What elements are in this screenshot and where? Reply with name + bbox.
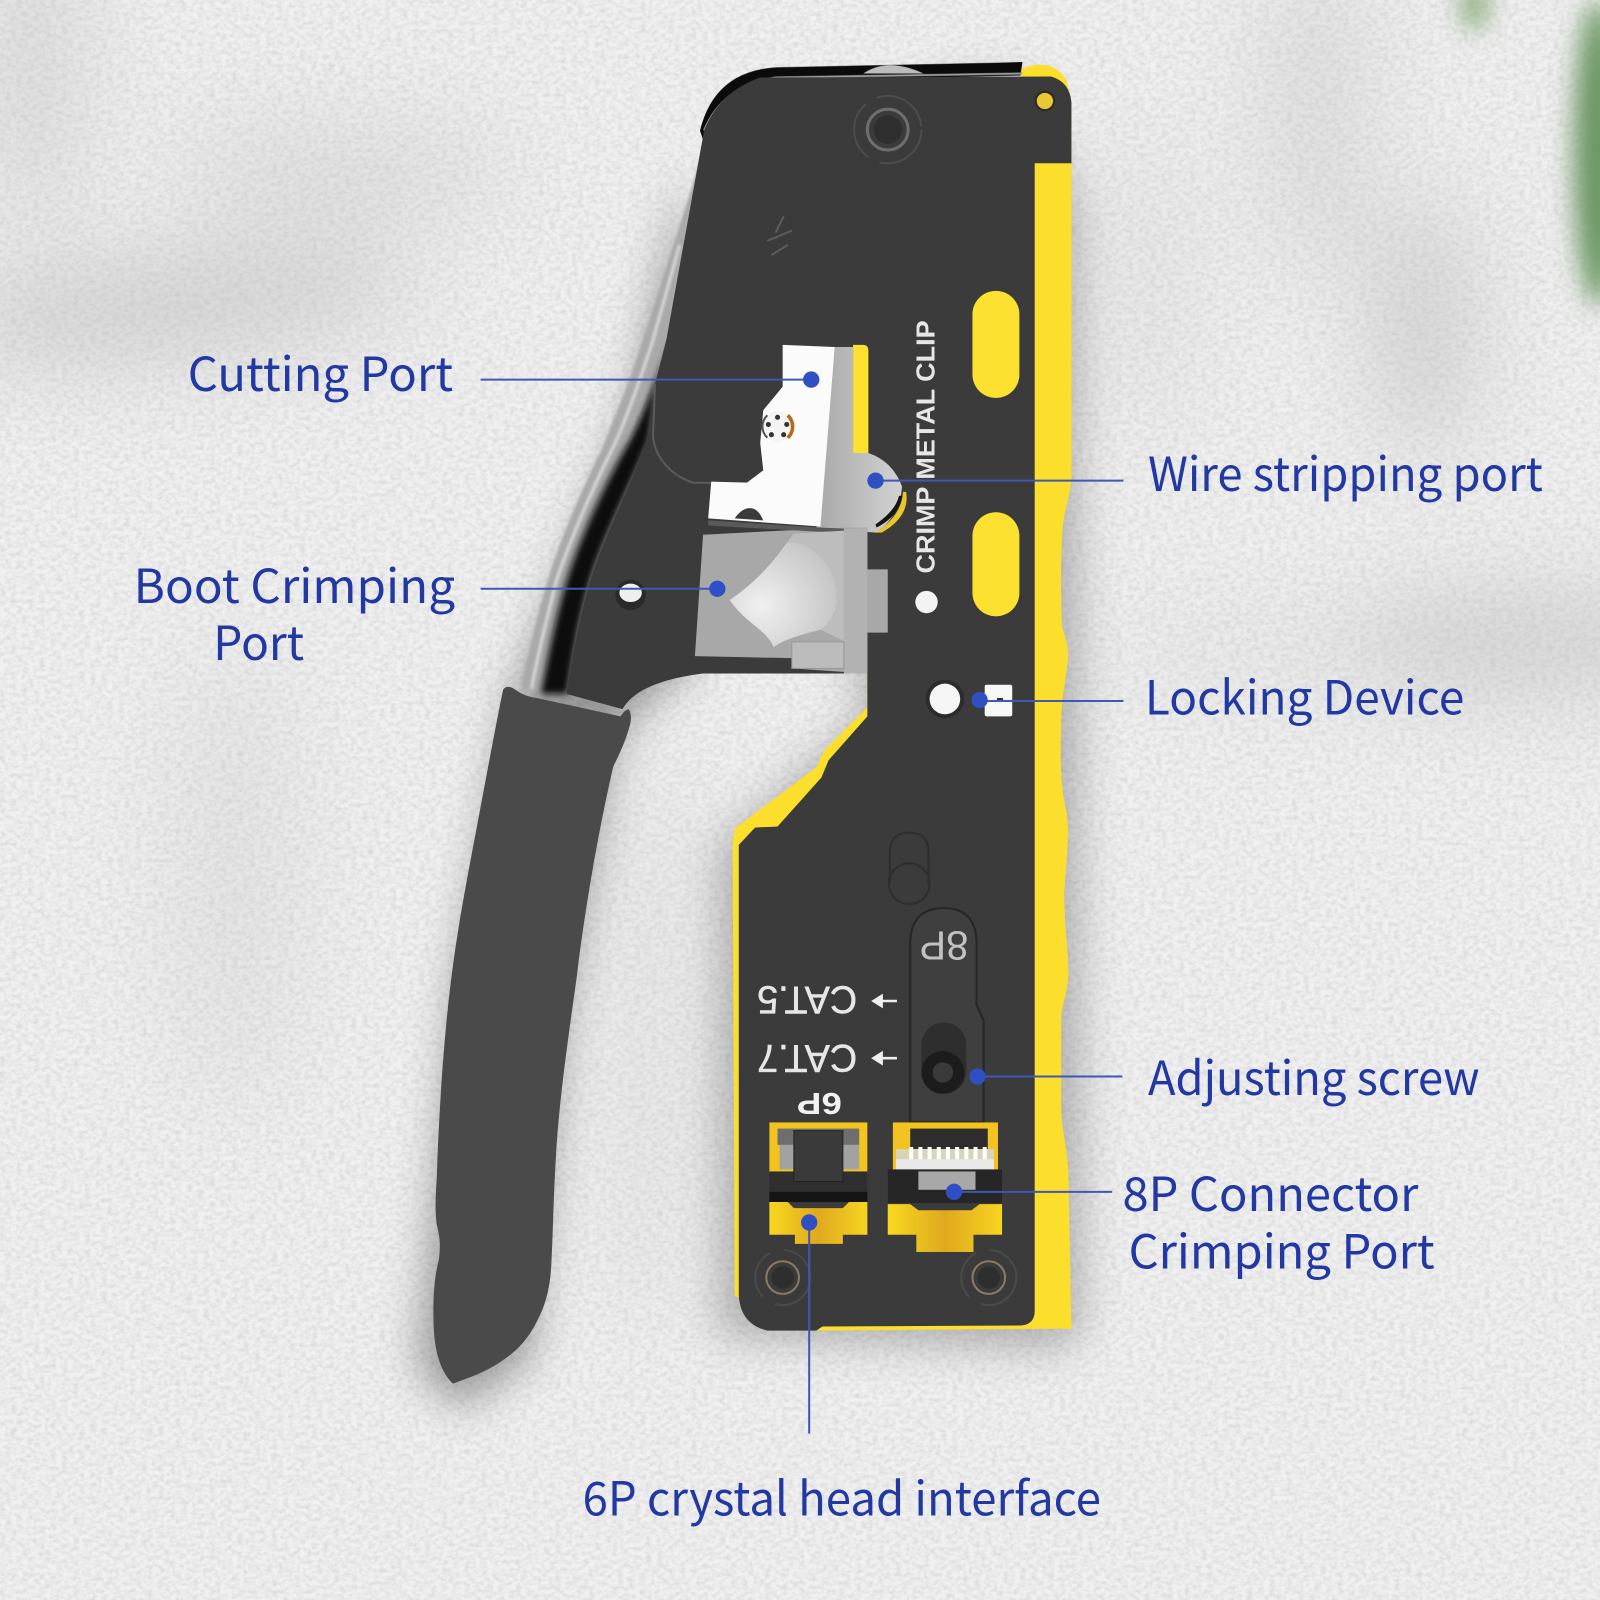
dark top back edge — [700, 62, 1022, 143]
callout: 6P crystal head interface — [583, 1214, 1101, 1529]
main body plate and arm — [566, 77, 1071, 1331]
yellow back plate with wavy edge — [733, 65, 1071, 1331]
callout: cutting port: Cutting Port — [188, 337, 453, 405]
white hole — [915, 591, 938, 613]
callout: adjusting screw: Adjusting screw — [1148, 1041, 1480, 1109]
callout: wire stripping port — [867, 437, 1543, 505]
chrome handle arm edge — [521, 153, 702, 693]
callout: 8P connector crimping port — [946, 1157, 1435, 1282]
6P port — [769, 1122, 867, 1244]
stripping port metal — [816, 347, 902, 533]
upside-down CAT labels and arrows: 6P — [797, 1086, 842, 1120]
8P port — [888, 1122, 1002, 1252]
callout: 8P connector crimping port: Crimping Port — [1129, 1214, 1435, 1282]
callout: boot crimping port: Boot Crimping — [134, 549, 455, 617]
yellow oval slots — [972, 291, 1019, 616]
embossed mark — [767, 216, 792, 255]
callout: boot crimping port — [134, 549, 726, 674]
callout: cutting port — [188, 337, 819, 405]
adjuster 8P mark: 8P — [919, 923, 968, 969]
cover plate outline — [653, 384, 750, 484]
callout: 8P connector crimping port: 8P Connector — [1122, 1157, 1419, 1225]
bottom screws — [755, 1250, 1016, 1305]
top right rivet — [1036, 92, 1054, 110]
star screw — [762, 411, 793, 442]
white cutter blade — [708, 345, 835, 527]
yellow strip by cutting port — [853, 345, 868, 453]
background leaf hints — [1460, 0, 1600, 306]
upside-down CAT labels and arrows: CAT.5 — [757, 978, 857, 1021]
boot crimping metal — [695, 520, 888, 673]
lower slot — [889, 833, 930, 904]
adjuster slider — [910, 908, 984, 1122]
callout: locking device — [971, 660, 1464, 728]
tool illustration — [433, 62, 1071, 1384]
vertical text: crimp metal clip: CRIMP METAL CLIP — [913, 320, 941, 573]
callout: locking device: Locking Device — [1145, 660, 1464, 728]
callout: 6P crystal head interface: 6P crystal head interface — [583, 1461, 1101, 1529]
black arm shadow strip — [541, 340, 669, 694]
tool drop shadow — [418, 82, 1082, 1408]
callout: adjusting screw — [969, 1041, 1480, 1109]
arm pivot screw — [615, 580, 646, 610]
callout: boot crimping port: Port — [213, 606, 304, 674]
locking device — [926, 680, 1012, 718]
rubber handle grip — [433, 687, 631, 1384]
upside-down CAT labels and arrows: CAT.7 — [757, 1036, 857, 1079]
upside-down CAT labels and arrows — [757, 978, 897, 1120]
callout: wire stripping port: Wire stripping port — [1148, 437, 1543, 505]
upper screw — [854, 96, 921, 163]
